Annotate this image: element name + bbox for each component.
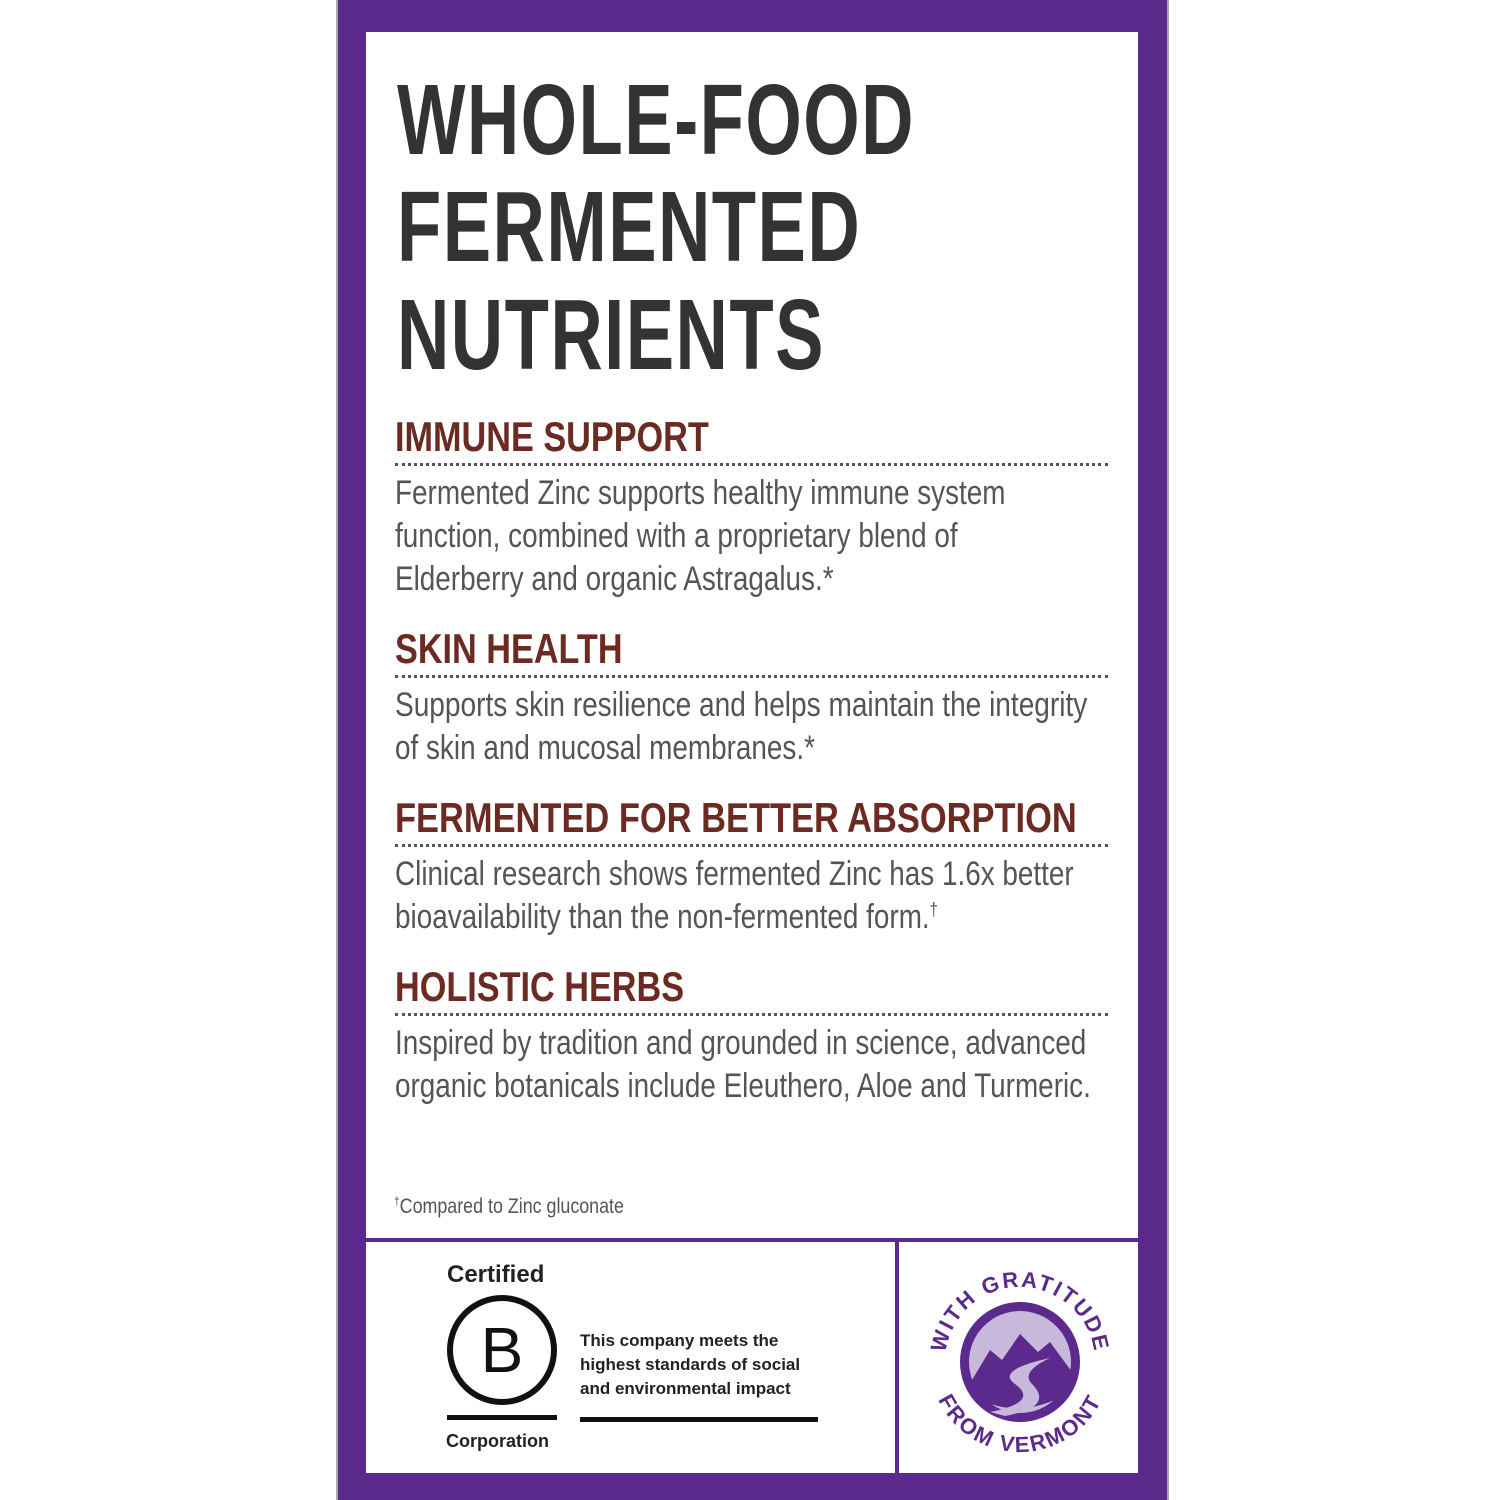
section: holistic herbs: HOLISTIC HERBS — [395, 963, 684, 1010]
section: skin health: SKIN HEALTH — [395, 625, 623, 672]
section: immune support: IMMUNE SUPPORT — [395, 413, 709, 460]
B corp logo: and environmental impact — [580, 1379, 791, 1398]
section: skin health — [395, 625, 1108, 767]
section: fermented for better absorption: bioavailability than the non-fermented form.† — [395, 898, 938, 936]
B corp logo — [446, 1261, 818, 1451]
section: skin health: Supports skin resilience and helps maintain the integrity — [395, 686, 1087, 724]
B corp logo: Corporation — [446, 1431, 549, 1451]
section: fermented for better absorption: Clinical research shows fermented Zinc has 1.6x better — [395, 855, 1074, 893]
section: holistic herbs — [395, 963, 1108, 1105]
badge: with gratitude from vermont: FROM VERMONT — [938, 1394, 1098, 1452]
section: fermented for better absorption: FERMENTED FOR BETTER ABSORPTION — [395, 794, 1077, 841]
section: immune support: Elderberry and organic Astragalus.* — [395, 560, 834, 598]
section: holistic herbs: Inspired by tradition and grounded in science, advanced — [395, 1024, 1086, 1062]
frame — [338, 0, 1167, 1500]
section: immune support: function, combined with a proprietary blend of — [395, 517, 958, 555]
section: holistic herbs: organic botanicals include Eleuthero, Aloe and Turmeric. — [395, 1067, 1091, 1105]
badge: with gratitude from vermont: WITH GRATITUDE — [930, 1272, 1109, 1350]
B corp logo: B — [481, 1314, 523, 1386]
section: skin health: of skin and mucosal membranes.* — [395, 729, 815, 767]
title — [397, 64, 915, 391]
title: FERMENTED — [397, 171, 861, 283]
B corp logo: This company meets the — [580, 1331, 778, 1350]
B corp logo: highest standards of social — [580, 1355, 800, 1374]
section: immune support: Fermented Zinc supports healthy immune system — [395, 474, 1006, 512]
footnote: †Compared to Zinc gluconate — [394, 1194, 624, 1218]
section: immune support — [395, 413, 1108, 598]
section: fermented for better absorption — [395, 794, 1108, 936]
title: WHOLE-FOOD — [397, 64, 915, 176]
badge: with gratitude from vermont — [930, 1272, 1109, 1452]
B corp logo: Certified — [447, 1261, 544, 1288]
title: NUTRIENTS — [397, 279, 825, 391]
